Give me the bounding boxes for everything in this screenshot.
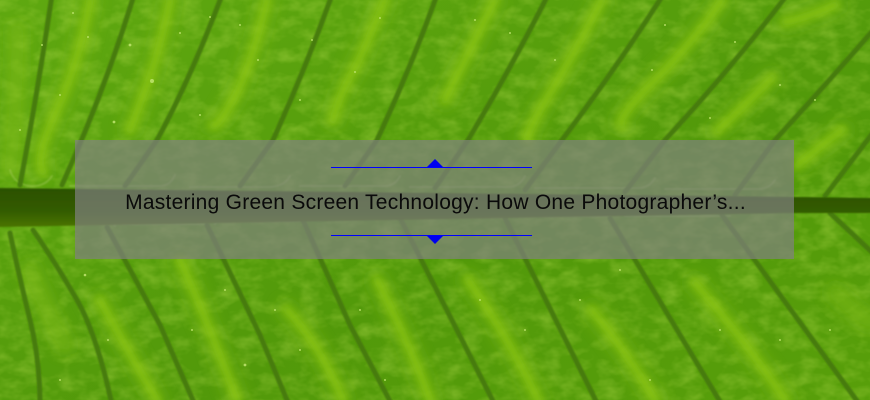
bottom diamond marker: [427, 236, 443, 244]
translucent title panel: [75, 140, 794, 259]
bottom divider line: [331, 235, 532, 236]
top divider line: [331, 167, 532, 168]
top diamond marker: [427, 159, 443, 167]
title text: Mastering Green Screen Technology: How One Photographer’s...: [125, 191, 746, 214]
pale rounded cell edges along the midrib: [10, 170, 775, 226]
central midrib, tapering to the right: [0, 188, 870, 227]
